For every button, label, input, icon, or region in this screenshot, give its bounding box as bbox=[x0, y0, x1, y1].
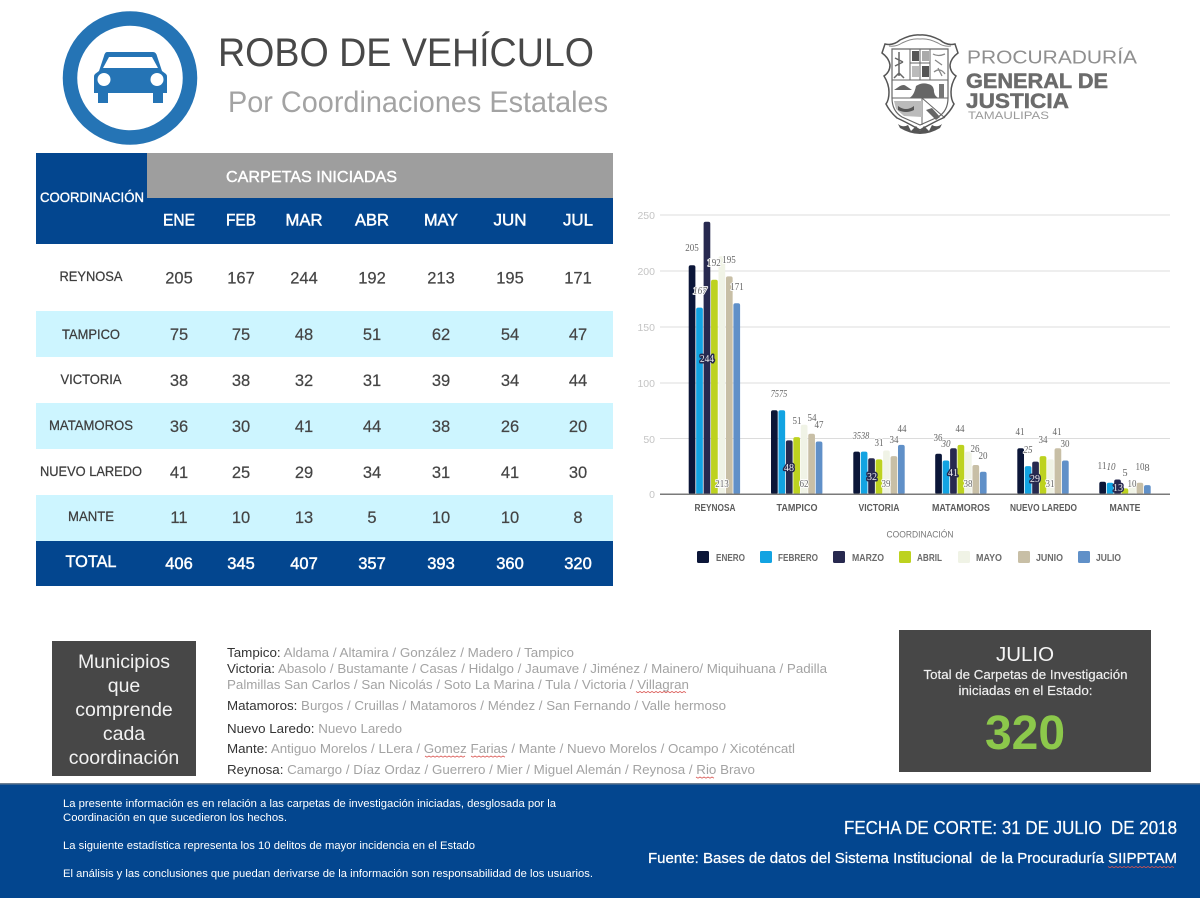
row: Reynosa: 195 bbox=[496, 270, 524, 288]
row: Mante: 10 bbox=[432, 509, 450, 527]
table header: FEB bbox=[226, 212, 256, 230]
table header: CARPETAS INICIADAS bbox=[226, 169, 397, 186]
logo: Procuraduría General de Justicia Tamaulipas: JUSTICIA bbox=[966, 89, 1069, 113]
legend: MAYO bbox=[976, 553, 1002, 564]
row: Nuevo Laredo: 41 bbox=[501, 464, 519, 482]
bars: Nuevo Laredo: 41 bbox=[1016, 427, 1024, 438]
bars: Nuevo Laredo: 29 bbox=[1030, 474, 1040, 485]
row: Reynosa: 213 bbox=[427, 270, 455, 288]
footer notes: La presente información es en relación a las carpetas de investigación iniciadas, desglosada por la bbox=[63, 798, 557, 810]
category labels: TAMPICO bbox=[776, 503, 818, 514]
bars: Tampico bbox=[771, 389, 824, 494]
bars: Reynosa: 205 bbox=[685, 243, 699, 254]
row: Matamoros: 38 bbox=[432, 418, 450, 436]
category labels: MATAMOROS bbox=[932, 503, 990, 514]
row: Victoria: 38 bbox=[170, 372, 188, 390]
category labels bbox=[694, 503, 1141, 514]
row: Reynosa: 171 bbox=[564, 270, 592, 288]
bars: Victoria: 34 bbox=[890, 435, 899, 446]
row: Nuevo Laredo: 29 bbox=[295, 464, 313, 482]
bars: Victoria bbox=[852, 424, 907, 494]
bars: Victoria: 44 bbox=[898, 424, 907, 435]
table header: COORDINACIÓN bbox=[40, 189, 144, 205]
row: Nuevo Laredo: 30 bbox=[569, 464, 587, 482]
row: Nuevo Laredo: 34 bbox=[363, 464, 381, 482]
axis title: COORDINACIÓN bbox=[886, 530, 954, 540]
text block: municipalities per coordination: Matamoros: Burgos / Cruillas / Matamoros / Méndez / San Fernando / Valle hermoso bbox=[227, 698, 726, 713]
bars: Matamoros: 38 bbox=[964, 479, 972, 490]
bars: Tampico: 51 bbox=[792, 416, 802, 427]
subtitle: Por Coordinaciones Estatales bbox=[228, 86, 608, 119]
bars: Matamoros: 41 bbox=[948, 468, 958, 479]
cut-off date: FECHA DE CORTE: 31 DE JULIO DE 2018 bbox=[844, 818, 1177, 838]
legend: ABRIL bbox=[917, 553, 942, 564]
text block: municipalities per coordination: Tampico: Aldama / Altamira / González / Madero / Tampico bbox=[227, 645, 574, 660]
legend: JULIO bbox=[1096, 553, 1121, 564]
y axis labels: 50 bbox=[643, 434, 655, 446]
row: Nuevo Laredo: 41 bbox=[170, 464, 188, 482]
panel: municipios box: coordinación bbox=[69, 747, 179, 769]
y axis labels: 250 bbox=[637, 210, 655, 222]
row: Matamoros: 30 bbox=[232, 418, 250, 436]
row: Reynosa: 167 bbox=[227, 270, 255, 288]
table header: JUL bbox=[563, 212, 593, 230]
footer notes: El análisis y las conclusiones que puedan derivarse de la información son responsabilidad de los usuarios. bbox=[63, 868, 593, 880]
y axis labels: 200 bbox=[637, 266, 655, 278]
bars: Tampico: 48 bbox=[784, 463, 794, 474]
row: Total bbox=[36, 541, 613, 586]
panel: data table bbox=[36, 153, 613, 586]
row: Tampico: 47 bbox=[569, 326, 587, 344]
row: Tampico: 54 bbox=[501, 326, 519, 344]
bars: Tampico: 54 bbox=[808, 413, 817, 424]
text block: municipalities per coordination: Reynosa: Camargo / Díaz Ordaz / Guerrero / Mier / Miguel Alemán / Reynosa / Rio Bravo bbox=[227, 762, 755, 777]
row: Victoria: 32 bbox=[295, 372, 313, 390]
row: Reynosa: 244 bbox=[290, 270, 318, 288]
row: Mante: 11 bbox=[170, 509, 188, 527]
row: Victoria: 39 bbox=[432, 372, 450, 390]
panel: municipios box: Municipios bbox=[78, 651, 170, 673]
logo: Procuraduría General de Justicia Tamaulipas: TAMAULIPAS bbox=[968, 110, 1049, 122]
bars: Tampico: 47 bbox=[814, 420, 824, 431]
panel: municipios box: comprende bbox=[75, 699, 173, 721]
row: Mante bbox=[36, 495, 613, 541]
category labels: VICTORIA bbox=[858, 503, 900, 514]
row: Tampico: 75 bbox=[232, 326, 250, 344]
table header: JUN bbox=[494, 212, 526, 230]
row: Victoria: 38 bbox=[232, 372, 250, 390]
bars: Matamoros: 30 bbox=[941, 439, 951, 450]
row: Tampico: 75 bbox=[170, 326, 188, 344]
bars: Mante: 8 bbox=[1144, 463, 1150, 474]
panel: municipios box: cada bbox=[103, 723, 145, 745]
y axis labels: 0 bbox=[649, 489, 655, 501]
bars: Matamoros: 20 bbox=[978, 451, 988, 462]
bars: Matamoros bbox=[934, 424, 988, 494]
row: Mante: 10 bbox=[232, 509, 250, 527]
title: ROBO DE VEHÍCULO bbox=[218, 30, 594, 75]
logo: Procuraduría General de Justicia Tamaulipas: PROCURADURÍA bbox=[967, 48, 1137, 68]
row: Total: 360 bbox=[496, 555, 524, 573]
bars: Victoria: 32 bbox=[867, 472, 877, 483]
footer band bbox=[0, 783, 1200, 898]
text block: municipalities per coordination: Nuevo Laredo: Nuevo Laredo bbox=[227, 721, 402, 736]
text block: municipalities per coordination: Victoria: Abasolo / Bustamante / Casas / Hidalgo / Jaumave / Jiménez / Mainero/ Miquihuana / Padilla bbox=[227, 661, 828, 676]
footer notes: La siguiente estadística representa los 10 delitos de mayor incidencia en el Estado bbox=[63, 840, 475, 852]
bar chart bbox=[637, 210, 1170, 564]
legend bbox=[697, 551, 1121, 564]
bars: Mante: 10 bbox=[1136, 462, 1144, 473]
y axis labels: 100 bbox=[637, 378, 655, 390]
bars: Mante: 10 bbox=[1128, 479, 1136, 490]
bars: Mante: 5 bbox=[1122, 468, 1128, 479]
bars: Mante: 11 bbox=[1098, 461, 1106, 472]
source: Fuente: Bases de datos del Sistema Institucional de la Procuraduría SIIPPTAM bbox=[648, 851, 1177, 867]
bars: Nuevo Laredo: 30 bbox=[1060, 439, 1070, 450]
bars: Matamoros: 36 bbox=[934, 433, 942, 444]
bars: Reynosa: 195 bbox=[722, 255, 736, 266]
y axis labels bbox=[637, 210, 655, 501]
bars: Mante bbox=[1098, 461, 1151, 495]
table header bbox=[36, 153, 613, 244]
row: Reynosa: REYNOSA bbox=[60, 268, 123, 284]
row: Matamoros: 41 bbox=[295, 418, 313, 436]
text block: municipalities per coordination: Palmillas San Carlos / San Nicolás / Soto La Marina / Tula / Victoria / Villagran bbox=[227, 677, 689, 692]
bars: Reynosa: 192 bbox=[707, 258, 721, 269]
bars: Nuevo Laredo: 34 bbox=[1038, 435, 1048, 446]
bars: Mante: 10 bbox=[1106, 462, 1116, 473]
bars: Reynosa: 167 bbox=[693, 286, 708, 297]
panel: municipios box: que bbox=[108, 675, 140, 697]
legend: JUNIO bbox=[1036, 553, 1063, 564]
bars: Victoria: 39 bbox=[882, 479, 890, 490]
bars: Tampico: 7575 bbox=[771, 389, 787, 400]
row: Total: 406 bbox=[165, 555, 193, 573]
text block: municipalities per coordination: Mante: Antiguo Morelos / LLera / Gomez Farias / Mante / Nuevo Morelos / Ocampo / Xicoténcatl bbox=[227, 741, 795, 756]
big number 320: 320 bbox=[985, 707, 1065, 760]
bars: Reynosa bbox=[685, 222, 744, 495]
row: Victoria: 31 bbox=[363, 372, 381, 390]
row: Mante: MANTE bbox=[68, 508, 114, 524]
bars: Reynosa: 213 bbox=[715, 479, 729, 490]
row: Mante: 10 bbox=[501, 509, 519, 527]
row: Matamoros: 36 bbox=[170, 418, 188, 436]
row: Victoria: 34 bbox=[501, 372, 519, 390]
row: Reynosa: 192 bbox=[358, 270, 386, 288]
row: Reynosa bbox=[60, 268, 592, 288]
table header: ENE bbox=[163, 212, 195, 230]
logo: Procuraduría General de Justicia Tamaulipas bbox=[882, 35, 1137, 134]
table header: MAR bbox=[286, 212, 323, 230]
bars: Nuevo Laredo: 25 bbox=[1024, 445, 1032, 456]
row: Total: TOTAL bbox=[66, 553, 116, 571]
bars: Nuevo Laredo bbox=[1016, 427, 1070, 495]
row: Reynosa: 205 bbox=[165, 270, 193, 288]
row: Tampico: TAMPICO bbox=[62, 326, 120, 342]
row: Matamoros: 26 bbox=[501, 418, 519, 436]
row: Mante: 5 bbox=[367, 509, 377, 527]
row: Total: 357 bbox=[358, 555, 386, 573]
row: Total: 320 bbox=[564, 555, 592, 573]
row: Matamoros: MATAMOROS bbox=[49, 417, 133, 433]
table header: MAY bbox=[424, 212, 458, 230]
category labels: MANTE bbox=[1110, 503, 1141, 514]
logo: Procuraduría General de Justicia Tamaulipas: GENERAL DE bbox=[966, 69, 1108, 93]
callout: July total bbox=[899, 630, 1151, 772]
footer notes: Coordinación en que sucedieron los hechos. bbox=[63, 812, 287, 824]
row: Nuevo Laredo bbox=[40, 463, 587, 482]
row: Mante: 8 bbox=[573, 509, 583, 527]
bars: Nuevo Laredo: 31 bbox=[1046, 479, 1054, 490]
bars: Matamoros: 26 bbox=[970, 444, 980, 455]
row: Mante: 13 bbox=[295, 509, 313, 527]
row: Tampico: 51 bbox=[363, 326, 381, 344]
panel: municipios box bbox=[52, 641, 196, 776]
row: Nuevo Laredo: 25 bbox=[232, 464, 250, 482]
bars: Reynosa: 171 bbox=[730, 282, 744, 293]
bars: Nuevo Laredo: 41 bbox=[1052, 427, 1062, 438]
legend: MARZO bbox=[852, 553, 884, 564]
legend: ENERO bbox=[716, 553, 745, 564]
row: Tampico: 62 bbox=[432, 326, 450, 344]
icon: car in blue circle bbox=[70, 18, 190, 138]
row: Total: 393 bbox=[427, 555, 455, 573]
category labels: NUEVO LAREDO bbox=[1010, 503, 1077, 514]
row: Victoria: VICTORIA bbox=[60, 371, 122, 387]
category labels: REYNOSA bbox=[694, 503, 736, 514]
callout: July total: iniciadas en el Estado: bbox=[958, 684, 1092, 698]
icon: coat of arms shield bbox=[882, 35, 958, 134]
text block: municipalities per coordination bbox=[227, 645, 828, 778]
callout: July total: Total de Carpetas de Investigación bbox=[924, 668, 1128, 682]
row: Victoria: 44 bbox=[569, 372, 587, 390]
row: Matamoros: 44 bbox=[363, 418, 381, 436]
bars: Matamoros: 44 bbox=[956, 424, 965, 435]
row: Tampico bbox=[36, 311, 613, 357]
row: Matamoros bbox=[36, 403, 613, 449]
row: Total: 345 bbox=[227, 555, 255, 573]
row: Tampico: 48 bbox=[295, 326, 313, 344]
row: Victoria bbox=[60, 371, 587, 390]
bars: Reynosa: 244 bbox=[700, 354, 715, 365]
table header: ABR bbox=[355, 212, 389, 230]
footer notes bbox=[63, 798, 593, 880]
callout: July total: JULIO bbox=[996, 643, 1054, 666]
y axis labels: 150 bbox=[637, 322, 655, 334]
bars: Victoria: 31 bbox=[874, 438, 884, 449]
legend: FEBRERO bbox=[778, 553, 818, 564]
bars: Victoria: 3538 bbox=[852, 431, 870, 442]
row: Total: 407 bbox=[290, 555, 318, 573]
bars: Tampico: 62 bbox=[800, 479, 808, 490]
row: Nuevo Laredo: 31 bbox=[432, 464, 450, 482]
row: Matamoros: 20 bbox=[569, 418, 587, 436]
row: Nuevo Laredo: NUEVO LAREDO bbox=[40, 463, 142, 479]
bars: Mante: 13 bbox=[1113, 483, 1123, 494]
